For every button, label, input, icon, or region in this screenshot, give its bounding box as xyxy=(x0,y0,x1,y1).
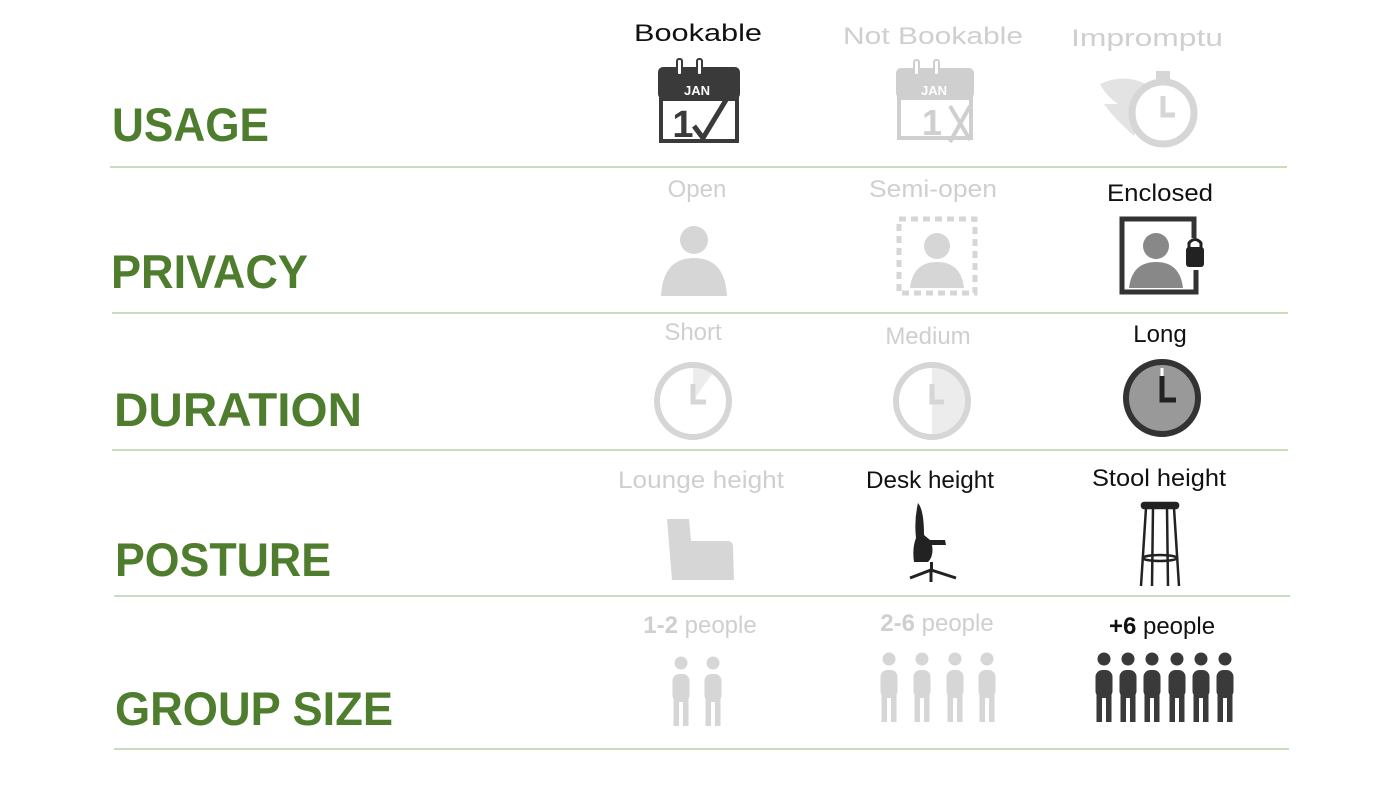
label: +6 people: +6 people xyxy=(1109,613,1215,640)
icon: calendar check xyxy=(658,59,740,146)
icon: desk chair xyxy=(910,503,956,582)
icon: semi-open person xyxy=(899,219,975,293)
icon: enclosed person lock xyxy=(1122,219,1204,292)
label: medium: Medium xyxy=(885,323,971,350)
icon: calendar x: 1 xyxy=(922,102,942,143)
icon: medium clock xyxy=(896,365,968,437)
label: 1-2 people: 1-2 people xyxy=(643,612,757,639)
icon: calendar check: JAN xyxy=(684,83,710,98)
heading: usage: USAGE xyxy=(112,98,269,151)
label: short: Short xyxy=(664,319,722,346)
icon: six people xyxy=(1096,652,1234,722)
label: 2-6 people: 2-6 people xyxy=(880,610,994,637)
label: enclosed: Enclosed xyxy=(1107,180,1213,207)
label: lounge height: Lounge height xyxy=(618,467,784,494)
heading: privacy: PRIVACY xyxy=(111,245,308,298)
icon: open person xyxy=(661,226,727,296)
label: not bookable: Not Bookable xyxy=(843,23,1023,50)
icon: two people xyxy=(672,656,722,726)
icon: calendar x: JAN xyxy=(921,83,947,98)
icon: calendar check: 1 xyxy=(672,104,694,146)
icon: long clock xyxy=(1126,362,1198,434)
label: stool height: Stool height xyxy=(1092,465,1226,492)
heading: group size: GROUP SIZE xyxy=(115,682,393,735)
heading: posture: POSTURE xyxy=(115,533,331,586)
icon: stopwatch xyxy=(1100,71,1194,144)
icon: short clock xyxy=(657,365,729,437)
icon: stool xyxy=(1141,503,1179,586)
label: long: Long xyxy=(1133,321,1187,348)
icon: calendar x xyxy=(896,60,974,143)
label: desk height: Desk height xyxy=(866,467,994,494)
label: open: Open xyxy=(668,176,726,203)
heading: duration: DURATION xyxy=(114,383,362,436)
label: impromptu: Impromptu xyxy=(1071,25,1223,52)
icon: four people xyxy=(880,652,996,722)
label: bookable: Bookable xyxy=(634,20,762,47)
icon: lounge chair xyxy=(667,519,734,580)
label: semi-open: Semi-open xyxy=(869,176,997,203)
